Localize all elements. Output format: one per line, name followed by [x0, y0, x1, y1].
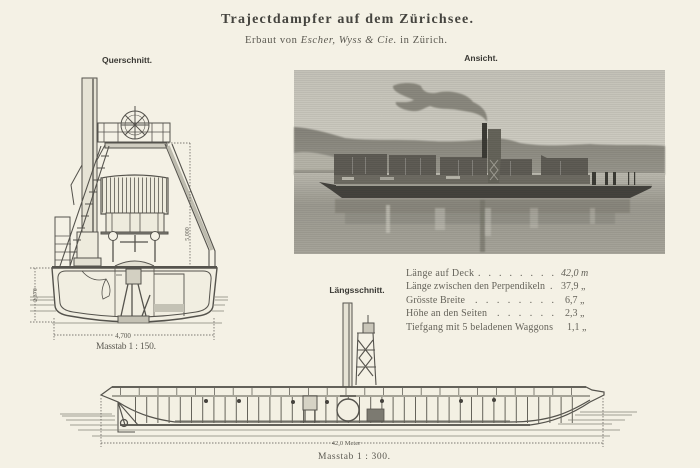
dimension label: depth: 2,370	[33, 288, 39, 302]
rudder and stern gear	[118, 402, 138, 432]
overall length dimension	[101, 398, 603, 447]
dimension label: height: 5,000	[185, 227, 191, 241]
row: height at sides: 2,3 „	[565, 308, 584, 319]
engine	[300, 396, 320, 422]
engine	[82, 261, 184, 323]
row: height at sides: Höhe an den Seiten	[406, 308, 487, 319]
hull section	[52, 267, 217, 322]
water lines	[30, 297, 228, 323]
sloped bridge supports	[71, 144, 215, 268]
ladder	[55, 146, 109, 267]
panel: cross-section drawing	[30, 78, 228, 340]
reflections	[335, 199, 630, 252]
caption: longitudinal scale: Masstab 1 : 300.	[318, 452, 390, 462]
row: draught with 5 loaded wagons: 1,1 „	[567, 322, 586, 333]
sky	[294, 70, 665, 173]
row: greatest width	[406, 295, 584, 306]
row: length between perpendiculars: Länge zwischen den Perpendikeln	[406, 281, 545, 292]
panel: longitudinal section drawing	[60, 303, 637, 447]
dimensions	[30, 143, 214, 340]
tower	[356, 315, 376, 385]
distant hills	[294, 127, 665, 175]
heading: Ansicht: Ansicht.	[464, 53, 498, 63]
boiler	[337, 396, 359, 421]
row: length on deck: 42,0 m	[561, 268, 588, 279]
row: length between perpendiculars: 37,9 „	[561, 281, 585, 292]
dimension label: width: 4,700	[115, 332, 131, 340]
steering wheel and bridge	[98, 106, 170, 148]
wagons	[334, 154, 590, 184]
portholes	[204, 398, 496, 404]
row: draught with 5 loaded wagons: Tiefgang mit 5 beladenen Waggons	[406, 322, 553, 333]
water lines	[60, 412, 637, 436]
table: ship dimensions	[406, 268, 588, 333]
dimension label: length: 42,0 Meter	[332, 440, 361, 447]
funnel and tower	[482, 123, 501, 183]
row: length on deck: . . . . . . . .	[478, 268, 554, 279]
railway wagon	[101, 175, 168, 262]
lake	[294, 173, 665, 254]
row: greatest width: Grösste Breite	[406, 295, 466, 306]
ferry hull	[319, 182, 652, 198]
title: Trajectdampfer auf dem Zürichsee.	[221, 12, 473, 27]
funnel	[343, 303, 352, 387]
caption: cross-section scale: Masstab 1 : 150.	[96, 342, 156, 352]
deck railings	[120, 387, 586, 395]
engraving texture	[294, 70, 665, 254]
row: greatest width: . . . . . . . .	[475, 295, 554, 306]
row: length on deck	[406, 268, 588, 279]
heading: Querschnitt: Querschnitt.	[102, 55, 152, 65]
row: length on deck: Länge auf Deck	[406, 268, 474, 279]
panel: engraving of the ferry	[294, 70, 665, 254]
frames	[135, 397, 580, 423]
row: greatest width: 6,7 „	[565, 295, 584, 306]
row: height at sides	[406, 308, 584, 319]
subtitle: Erbaut von Escher, Wyss & Cie. in Zürich.	[245, 35, 447, 46]
row: length between perpendiculars: .	[550, 281, 552, 292]
smoke	[393, 83, 487, 122]
figures on deck	[592, 172, 635, 185]
coal bunker	[367, 409, 384, 421]
funnel	[74, 78, 101, 266]
reflection highlights	[386, 205, 595, 236]
row: height at sides: . . . . . .	[497, 308, 554, 319]
hull outline	[101, 387, 604, 425]
heading: Längsschnitt: Längsschnitt.	[329, 285, 385, 295]
